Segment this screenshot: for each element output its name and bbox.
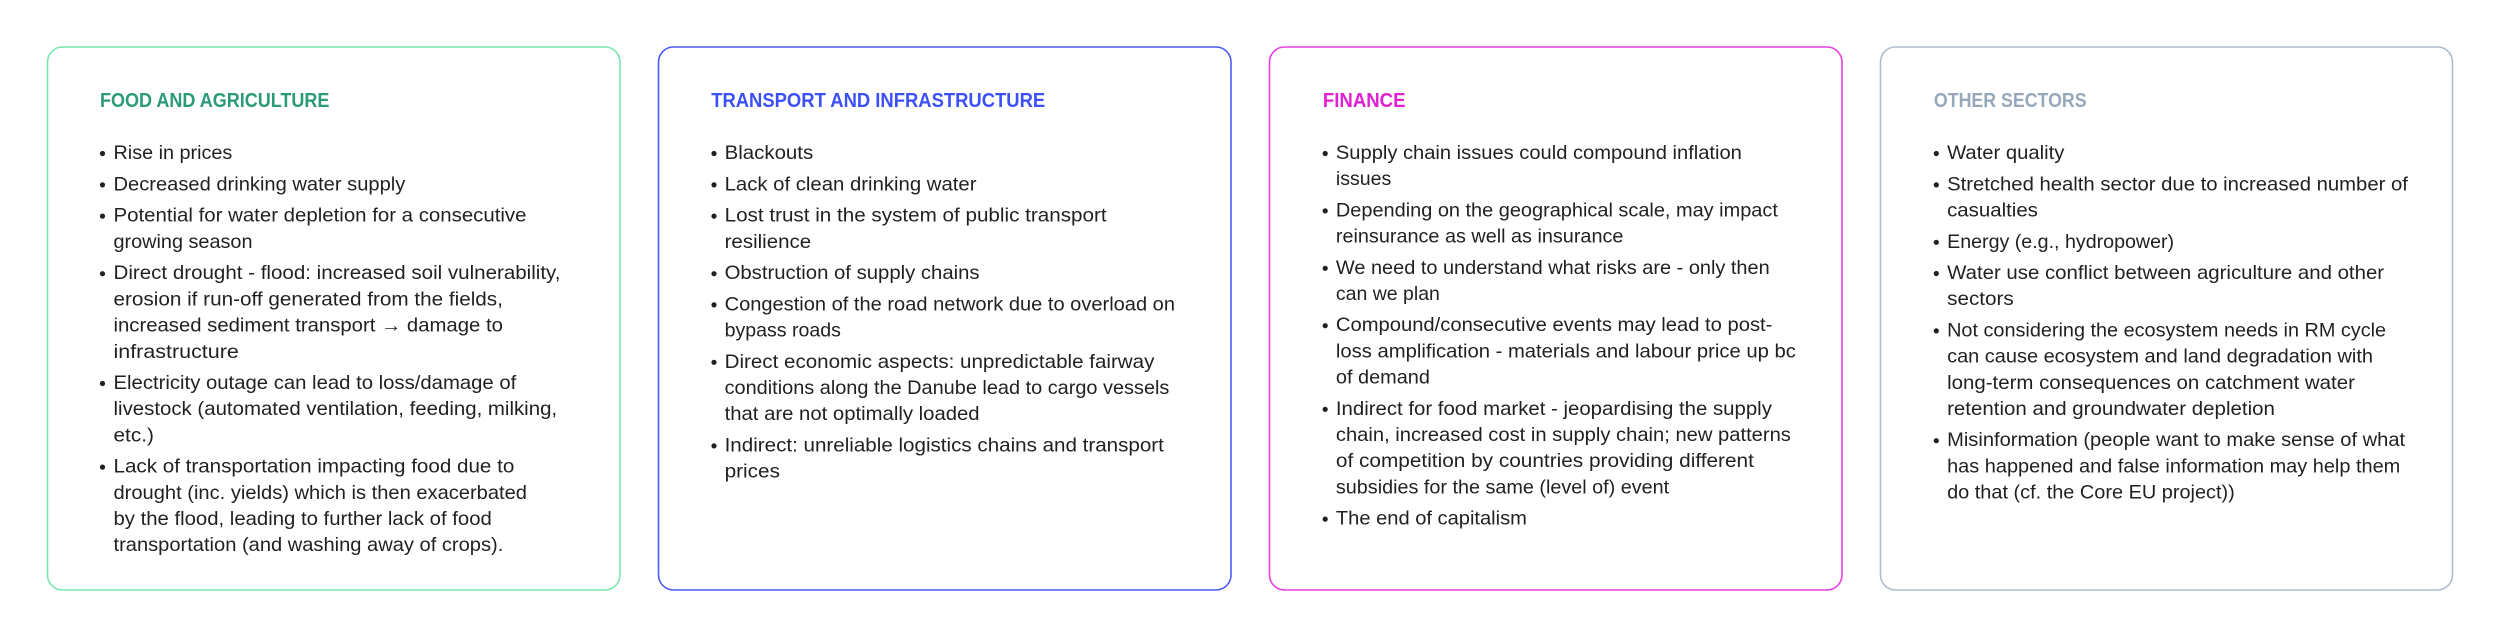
item: indirect logistics xyxy=(711,435,1165,483)
item: post-loss amplification: loss amplification - materials and labour price up bc xyxy=(1336,341,1796,362)
item: direct drought and flood: erosion if run-off generated from the fields, xyxy=(114,289,503,310)
item: indirect food market: Indirect for food market - jeopardising the supply xyxy=(1336,399,1772,420)
item: lost trust: resilience xyxy=(725,232,811,253)
item: ecosystem needs: can cause ecosystem and land degradation with xyxy=(1947,347,2373,368)
panel border: food and agriculture xyxy=(48,47,620,590)
item: supply chains: Obstruction of supply chains xyxy=(725,263,980,284)
item: water use conflict xyxy=(1934,263,2385,310)
item: understanding risks: We need to understand what risks are - only then xyxy=(1336,258,1770,279)
item: direct drought and flood: increased sediment transport → damage to xyxy=(114,316,503,337)
item: end of capitalism: The end of capitalism xyxy=(1336,509,1527,530)
item: road congestion xyxy=(711,294,1175,342)
item: drinking water supply: Decreased drinking water supply xyxy=(114,174,406,195)
item: inflation: Supply chain issues could compound inflation xyxy=(1336,143,1742,164)
item: post-loss amplification xyxy=(1323,315,1796,389)
panel border: other sectors xyxy=(1880,47,2452,590)
item: misinformation: do that (cf. the Core EU project)) xyxy=(1947,483,2235,504)
panel border: transport and infrastructure xyxy=(658,47,1231,590)
item: direct economic aspects: Direct economic aspects: unpredictable fairway xyxy=(725,352,1155,373)
panel: food and agriculture xyxy=(48,47,620,590)
item: electricity outage: etc.) xyxy=(114,425,154,446)
item: ecosystem needs: Not considering the ecosystem needs in RM cycle xyxy=(1947,320,2386,341)
item: reinsurance xyxy=(1323,200,1779,248)
item: energy: Energy (e.g., hydropower) xyxy=(1947,232,2174,253)
item: lack of transportation xyxy=(100,457,527,556)
item: lost trust xyxy=(711,206,1107,253)
item: lack of transportation: transportation (and washing away of crops). xyxy=(114,535,503,556)
item: post-loss amplification: of demand xyxy=(1336,368,1430,389)
item: direct economic aspects xyxy=(711,352,1169,425)
item: lost trust: Lost trust in the system of public transport xyxy=(725,206,1107,227)
item: indirect logistics: Indirect: unreliable logistics chains and transport xyxy=(725,435,1165,456)
item: indirect food market xyxy=(1323,399,1791,498)
item: reinsurance: Depending on the geographical scale, may impact xyxy=(1336,200,1779,221)
item: ecosystem needs xyxy=(1934,320,2386,420)
heading: other sectors: OTHER SECTORS xyxy=(1934,90,2087,112)
item: electricity outage: Electricity outage can lead to loss/damage of xyxy=(114,373,517,394)
bullet list: finance xyxy=(1323,143,1796,530)
item: lack of transportation: drought (inc. yields) which is then exacerbated xyxy=(114,483,527,504)
item: direct drought and flood: infrastructure xyxy=(114,342,239,363)
item: direct economic aspects: that are not optimally loaded xyxy=(725,404,980,425)
heading: transport and infrastructure: TRANSPORT AND INFRASTRUCTURE xyxy=(711,90,1045,112)
item: rise in prices: Rise in prices xyxy=(114,143,232,164)
bullet list: food and agriculture xyxy=(100,143,561,556)
item: water depletion: growing season xyxy=(114,232,252,253)
panel: finance xyxy=(1270,47,1842,590)
item: water depletion: Potential for water depletion for a consecutive xyxy=(114,206,526,227)
item: indirect food market: of competition by countries providing different xyxy=(1336,451,1755,472)
item: understanding risks xyxy=(1323,258,1770,305)
item: indirect logistics: prices xyxy=(725,462,780,483)
item: indirect food market: subsidies for the same (level of) event xyxy=(1336,477,1670,498)
bullet list: other sectors xyxy=(1934,143,2409,504)
item: understanding risks: can we plan xyxy=(1336,284,1440,305)
item: electricity outage: livestock (automated ventilation, feeding, milking, xyxy=(114,399,557,420)
item: misinformation xyxy=(1934,430,2406,504)
item: direct drought and flood xyxy=(100,263,561,363)
item: lack of transportation: by the flood, leading to further lack of food xyxy=(114,509,492,530)
item: ecosystem needs: long-term consequences on catchment water xyxy=(1947,373,2356,394)
panel border: finance xyxy=(1270,47,1842,590)
item: direct drought and flood: Direct drought - flood: increased soil vulnerability, xyxy=(114,263,560,284)
item: water quality: Water quality xyxy=(1947,143,2065,164)
item: ecosystem needs: retention and groundwater depletion xyxy=(1947,399,2275,420)
item: health sector xyxy=(1934,174,2409,222)
item: clean drinking water: Lack of clean drinking water xyxy=(725,174,977,195)
item: road congestion: Congestion of the road network due to overload on xyxy=(725,294,1175,315)
panel: other sectors xyxy=(1880,47,2452,590)
item: inflation: issues xyxy=(1336,169,1391,190)
item: misinformation: Misinformation (people want to make sense of what xyxy=(1947,430,2406,451)
item: water use conflict: sectors xyxy=(1947,289,2014,310)
heading: finance: FINANCE xyxy=(1323,90,1406,112)
item: indirect food market: chain, increased cost in supply chain; new patterns xyxy=(1336,425,1791,446)
item: blackouts: Blackouts xyxy=(725,143,813,164)
item: reinsurance: reinsurance as well as insurance xyxy=(1336,227,1623,248)
item: health sector: casualties xyxy=(1947,201,2038,222)
item: road congestion: bypass roads xyxy=(725,321,841,342)
panel: transport and infrastructure xyxy=(658,47,1231,590)
heading: food and agriculture: FOOD AND AGRICULTURE xyxy=(100,90,329,112)
item: lack of transportation: Lack of transportation impacting food due to xyxy=(114,457,514,478)
item: inflation xyxy=(1323,143,1742,190)
bullet list: transport and infrastructure xyxy=(711,143,1175,483)
item: misinformation: has happened and false information may help them xyxy=(1947,456,2400,477)
item: water depletion xyxy=(100,206,527,253)
item: electricity outage xyxy=(100,373,557,446)
item: direct economic aspects: conditions along the Danube lead to cargo vessels xyxy=(725,378,1169,399)
item: health sector: Stretched health sector due to increased number of xyxy=(1947,174,2409,195)
item: post-loss amplification: Compound/consecutive events may lead to post- xyxy=(1336,315,1772,336)
item: water use conflict: Water use conflict between agriculture and other xyxy=(1947,263,2385,284)
